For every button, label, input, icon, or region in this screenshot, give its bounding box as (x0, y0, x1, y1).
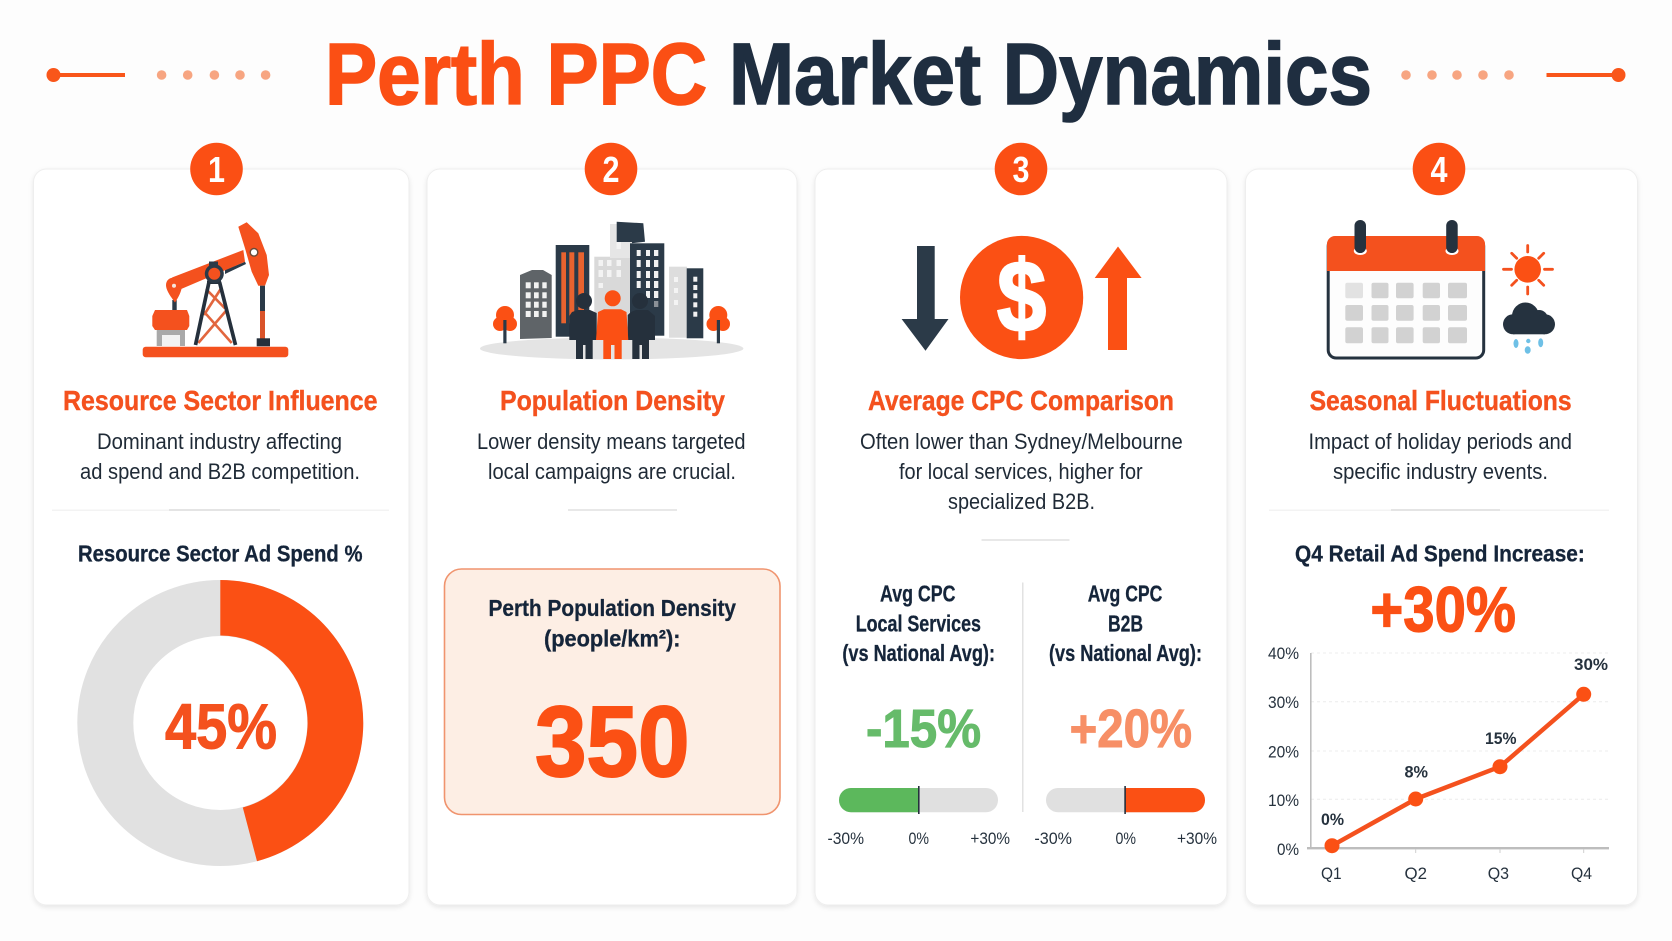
description: Lower density means targeted (477, 429, 746, 454)
heading: Population Density (500, 385, 725, 416)
y axis labels: 30% (1268, 693, 1299, 712)
panel: population density (427, 143, 797, 905)
description: ad spend and B2B competition. (80, 459, 360, 484)
description: local campaigns are crucial. (488, 459, 736, 484)
x axis labels (1321, 864, 1592, 883)
heading: Resource Sector Influence (63, 385, 378, 416)
description: Impact of holiday periods and (1308, 429, 1572, 454)
stat label: Perth Population Density (488, 595, 736, 621)
value: +20% (1070, 699, 1192, 759)
x axis labels: Q1 (1321, 864, 1342, 883)
description (1308, 429, 1572, 484)
x axis labels: Q3 (1488, 864, 1509, 883)
column label: Avg CPC (880, 581, 956, 607)
description: Often lower than Sydney/Melbourne (860, 429, 1183, 454)
badge 4 (1413, 143, 1465, 195)
value: -15% (866, 699, 981, 759)
column label: Local Services (856, 611, 981, 637)
bar scale: -30% (828, 829, 864, 848)
column label: B2B (1108, 611, 1143, 637)
description (477, 429, 746, 484)
icon: calendar (1327, 220, 1485, 358)
badge 1: 1 (208, 149, 225, 190)
donut value: 45% (165, 691, 277, 763)
description: specialized B2B. (948, 489, 1095, 514)
data labels: 30% (1574, 655, 1608, 674)
badge 2: 2 (602, 149, 620, 190)
bar scale (828, 829, 1010, 848)
data labels: 15% (1485, 729, 1516, 748)
panel: average CPC comparison (815, 143, 1227, 905)
trees (493, 306, 730, 343)
icon: city and people (480, 222, 743, 360)
column label: (vs National Avg): (842, 640, 995, 666)
icon: sun (1504, 246, 1552, 294)
y axis labels: 20% (1268, 742, 1299, 761)
badge 4: 4 (1430, 149, 1448, 190)
y axis labels: 40% (1268, 644, 1299, 663)
column: B2B (1034, 581, 1217, 848)
column label: Avg CPC (1088, 581, 1162, 607)
panel: resource sector influence (34, 143, 409, 905)
y axis labels: 10% (1268, 791, 1299, 810)
bar scale (1034, 829, 1217, 848)
bar scale: +30% (1177, 829, 1217, 848)
data line (1324, 687, 1591, 853)
people (569, 290, 655, 359)
bar scale: 0% (908, 829, 929, 848)
panel: seasonal fluctuations (1246, 143, 1638, 905)
stat label (488, 595, 736, 652)
badge 3: 3 (1012, 149, 1030, 190)
data labels: 0% (1321, 810, 1344, 829)
stat label: (people/km²): (544, 626, 680, 652)
description (80, 429, 360, 484)
chart title: Resource Sector Ad Spend % (78, 540, 362, 566)
icon: rain cloud (1503, 302, 1555, 354)
description: specific industry events. (1333, 459, 1548, 484)
x axis labels: Q2 (1404, 864, 1427, 883)
description (860, 429, 1183, 514)
x axis labels: Q4 (1571, 864, 1592, 883)
y axis labels: 0% (1277, 840, 1299, 859)
badge 2 (585, 143, 637, 195)
chart title: Q4 Retail Ad Spend Increase: (1295, 540, 1585, 566)
bar scale: -30% (1034, 829, 1072, 848)
data labels: 8% (1404, 763, 1428, 782)
bar scale: +30% (970, 829, 1010, 848)
badge 1 (190, 143, 243, 195)
badge 3 (995, 143, 1047, 195)
range bar (839, 786, 998, 814)
column: local services (828, 581, 1010, 848)
heading: Seasonal Fluctuations (1310, 385, 1572, 416)
headline value: +30% (1370, 574, 1516, 646)
column label: (vs National Avg): (1049, 640, 1202, 666)
bar scale: 0% (1116, 829, 1136, 848)
icon: dollar with arrows (902, 236, 1142, 359)
stat box (444, 569, 780, 814)
description: Dominant industry affecting (97, 429, 342, 454)
stat value: 350 (535, 686, 690, 798)
line chart (1268, 644, 1609, 883)
description: for local services, higher for (899, 459, 1143, 484)
title: Perth PPC Market Dynamics (325, 26, 1372, 123)
column label (1049, 581, 1202, 666)
y axis labels (1268, 644, 1299, 859)
data labels (1321, 655, 1608, 829)
icon: dollar with arrows: $ (997, 242, 1046, 354)
donut chart (105, 580, 363, 861)
header decoration: right (1401, 68, 1626, 82)
range bar (1046, 786, 1205, 814)
heading: Average CPC Comparison (868, 385, 1174, 416)
column label (842, 581, 995, 666)
icon: oil pump jack (143, 222, 288, 357)
header decoration: left (46, 68, 270, 82)
